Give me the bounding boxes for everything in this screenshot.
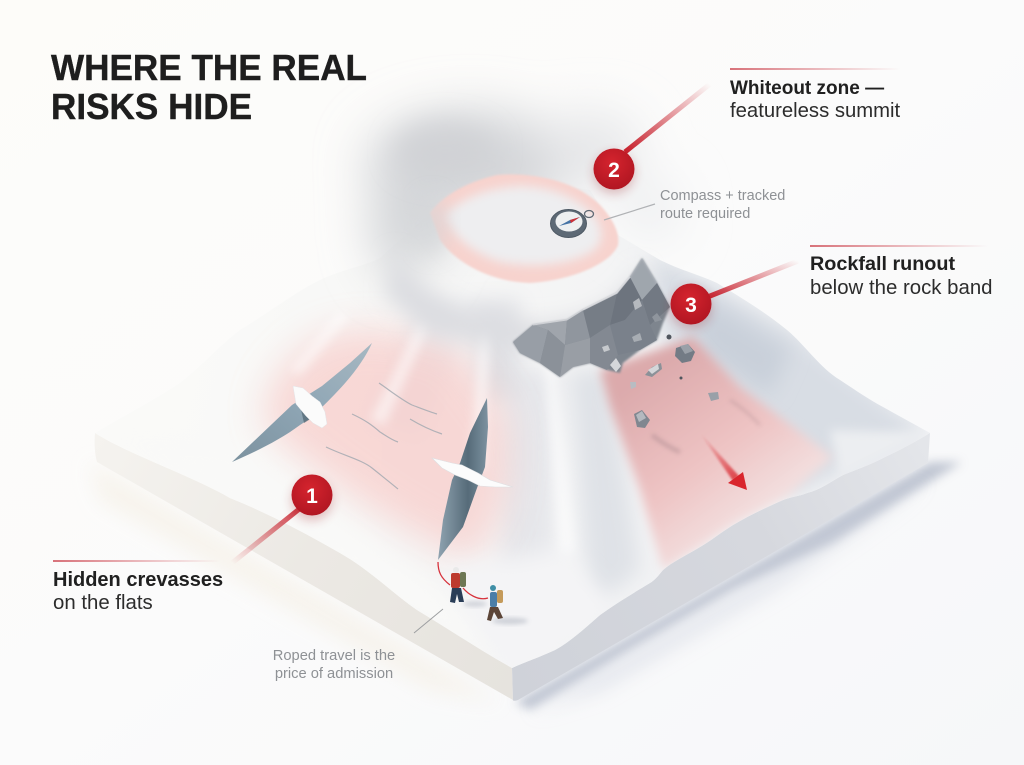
callout 1: hidden crevasses: Hidden crevasses (53, 569, 223, 591)
callout 3: rockfall runout: Rockfall runout (810, 253, 955, 275)
rock band (513, 258, 670, 377)
badge 1: 1 (306, 485, 318, 508)
mid streak shade (470, 296, 639, 592)
crevasse upper left (232, 343, 372, 462)
title (51, 47, 367, 127)
badge 1 (291, 474, 333, 521)
callout 2: whiteout zone: Whiteout zone — (730, 78, 884, 99)
summit plateau (416, 174, 618, 283)
hazard zone: runout (600, 337, 833, 570)
leader line 1 (232, 502, 308, 563)
callout 3: rockfall runout (810, 245, 993, 299)
icon: compass (550, 210, 594, 238)
note: compass: route required (660, 206, 750, 222)
leader: compass note (604, 204, 655, 220)
note: roped travel: Roped travel is the (273, 648, 395, 664)
snow slab sides (95, 433, 930, 701)
runout furrows (652, 400, 760, 452)
mountain body (246, 251, 930, 668)
crevasse front (432, 398, 513, 560)
haze under summit (385, 250, 650, 345)
note: roped travel: price of admission (275, 666, 393, 682)
callout 1: hidden crevasses: on the flats (53, 592, 153, 614)
arrow: rockfall direction (700, 433, 747, 490)
leader line 2 (625, 84, 710, 152)
callout 2: whiteout zone: featureless summit (730, 100, 901, 122)
callout 1: hidden crevasses (53, 560, 223, 614)
badge 2: 2 (608, 159, 620, 182)
leader: roped travel note (414, 609, 443, 633)
hazard zone: crevasses (265, 330, 509, 560)
climbers with rope (438, 562, 528, 624)
badge 3: 3 (685, 294, 697, 317)
slab shadow (90, 462, 962, 712)
front white flats (100, 430, 512, 670)
badge 2 (593, 148, 635, 194)
title: WHERE THE REAL (51, 47, 367, 88)
callout 2: whiteout zone (730, 68, 901, 122)
callout 3: rockfall runout: below the rock band (810, 277, 993, 299)
light streaks (296, 331, 560, 476)
badge 3 (670, 284, 712, 329)
cloud: whiteout (365, 110, 680, 280)
surface cracks (326, 383, 442, 489)
note: compass: Compass + tracked (660, 188, 785, 204)
falling rocks (630, 334, 719, 428)
title: RISKS HIDE (51, 86, 252, 127)
right flank shade (650, 250, 925, 495)
leader line 3 (705, 261, 798, 298)
